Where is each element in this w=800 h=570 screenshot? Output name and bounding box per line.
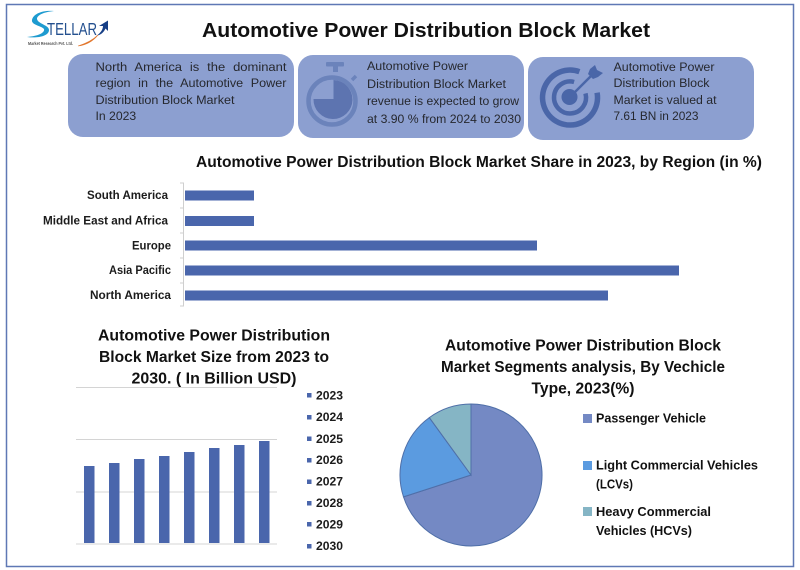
row: South America	[87, 188, 254, 202]
row: South America: South America	[87, 188, 168, 202]
legend: vehicle types: Passenger Vehicle	[596, 410, 706, 426]
row: Middle East and Africa	[43, 214, 254, 228]
legend: years: 2024	[316, 410, 343, 424]
panel text: revenue growth: Automotive Power	[367, 59, 468, 73]
bars	[84, 441, 270, 543]
legend: years: 2026	[316, 453, 343, 467]
panel: revenue growth	[298, 55, 524, 138]
panel text: market value: Market is valued at	[614, 93, 717, 107]
panel text: revenue growth: at 3.90 % from 2024 to 2030	[367, 112, 521, 126]
row: North America: North America	[90, 288, 171, 302]
heading: market size: 2030. ( In Billion USD)	[132, 370, 296, 388]
panel text: dominant region	[96, 60, 287, 123]
legend: vehicle types	[583, 410, 758, 538]
panel text: market value: 7.61 BN in 2023	[614, 109, 699, 123]
legend: years: 2027	[316, 474, 343, 488]
column chart: market size	[76, 328, 343, 553]
heading: vehicle type: Type, 2023(%)	[532, 380, 634, 398]
row: Europe: Europe	[132, 238, 171, 252]
pie chart: vehicle type	[400, 338, 758, 546]
legend: years: 2029	[316, 518, 343, 532]
heading: vehicle type: Market Segments analysis, By Vechicle	[441, 359, 725, 376]
legend: years: 2023	[316, 388, 343, 402]
panel text: revenue growth: Distribution Block Market	[367, 77, 507, 91]
panel: market value	[528, 57, 754, 140]
panel text: dominant region: Distribution Block Market	[96, 93, 235, 107]
panel text: dominant region: region in the Automotive Power	[96, 76, 286, 90]
title: Automotive Power Distribution Block Market	[202, 19, 650, 42]
logo: Market Research Pvt. Ltd.	[28, 41, 73, 47]
icon: target	[543, 65, 603, 125]
icon: stopwatch	[308, 62, 356, 124]
heading: market share by region: Automotive Power Distribution Block Market Share in 2023, by Region (in %)	[196, 154, 762, 171]
panel text: dominant region: North America is the dominant	[96, 60, 287, 74]
row: Europe	[132, 238, 537, 252]
row: North America	[90, 288, 608, 302]
panel text: market value: Distribution Block	[614, 76, 710, 90]
panel text: market value: Automotive Power	[614, 60, 714, 74]
legend: vehicle types: Heavy Commercial	[596, 504, 711, 519]
legend: years: 2025	[316, 432, 343, 446]
heading: market size	[98, 328, 330, 388]
logo	[27, 11, 108, 47]
bar chart: market share by region	[43, 154, 762, 306]
panel: dominant region	[68, 54, 294, 137]
panel text: market value	[614, 60, 717, 123]
heading: market size: Automotive Power Distribution	[98, 328, 330, 344]
panel text: dominant region: In 2023	[96, 109, 136, 123]
heading: vehicle type: Automotive Power Distribution Block	[445, 338, 721, 354]
panel text: revenue growth	[367, 59, 521, 126]
row: Asia Pacific: Asia Pacific	[109, 263, 171, 277]
legend: vehicle types: Vehicles (HCVs)	[596, 523, 692, 538]
row: Middle East and Africa: Middle East and Africa	[43, 214, 168, 228]
legend: vehicle types: Light Commercial Vehicles	[596, 458, 758, 472]
row: Asia Pacific	[109, 263, 679, 277]
heading: market size: Block Market Size from 2023 to	[99, 349, 329, 366]
pie slices	[400, 404, 542, 546]
legend: years	[307, 388, 343, 553]
logo: TELLAR	[47, 19, 97, 39]
legend: years: 2028	[316, 496, 343, 510]
legend: vehicle types: (LCVs)	[596, 476, 633, 492]
legend: years: 2030	[316, 539, 343, 553]
panel text: revenue growth: revenue is expected to grow	[367, 94, 519, 108]
heading: vehicle type	[441, 338, 725, 398]
